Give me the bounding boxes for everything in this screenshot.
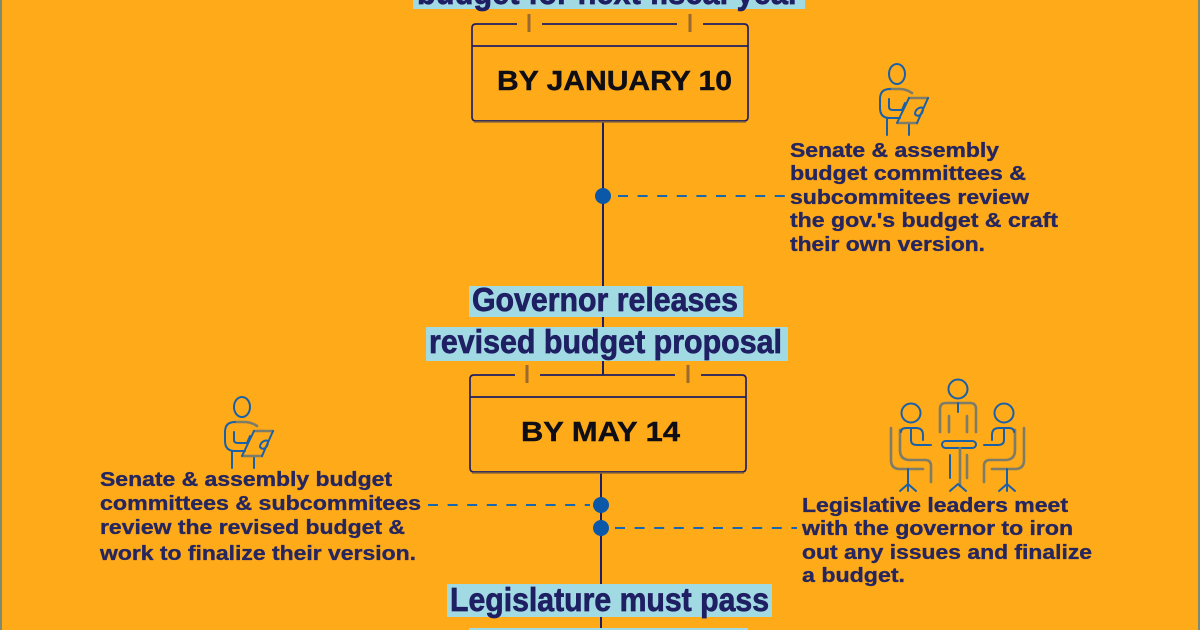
dot and dashed connector: leaders meet: [593, 520, 797, 536]
text: senate and assembly review the governor's budget: the gov.'s budget & craft: [790, 210, 1058, 232]
text: senate and assembly review the governor's budget: subcommitees review: [790, 187, 1030, 209]
icon: person with tablet (revised budget review): [225, 397, 273, 468]
dot and dashed connector: committees review: [595, 188, 785, 204]
text: legislative leaders meet with the governor: Legislative leaders meet: [802, 495, 1068, 517]
heading: governor releases revised budget proposal: Governor releases: [472, 281, 738, 318]
text: senate and assembly finalize their version: review the revised budget &: [100, 517, 405, 539]
calendar: by January 10: BY JANUARY 10: [497, 65, 732, 96]
text: legislative leaders meet with the governor: a budget.: [802, 565, 905, 587]
calendar: by May 14: BY MAY 14: [521, 416, 681, 447]
text: legislative leaders meet with the governor: [801, 495, 1092, 587]
text: senate and assembly review the governor's budget: budget committees &: [790, 163, 1026, 185]
heading: governor releases revised budget proposal: [426, 281, 788, 361]
text: legislative leaders meet with the governor: with the governor to iron: [801, 518, 1073, 540]
calendar: by May 14: [470, 365, 746, 473]
heading: legislature must pass: Legislature must pass: [450, 581, 769, 618]
text: senate and assembly review the governor's budget: Senate & assembly: [790, 140, 1000, 162]
text: senate and assembly finalize their version: committees & subcommitees: [100, 493, 421, 515]
calendar: by January 10: [472, 14, 748, 122]
heading: governor releases revised budget proposal: revised budget proposal: [429, 323, 782, 360]
text: senate and assembly review the governor's budget: their own version.: [790, 234, 985, 256]
text: legislative leaders meet with the governor: out any issues and finalize: [802, 542, 1092, 564]
icon: three people meeting at a table: [891, 380, 1024, 491]
text: senate and assembly review the governor's budget: [790, 140, 1058, 256]
dot and dashed connector: finalize version: [428, 497, 609, 513]
text: senate and assembly finalize their version: work to finalize their version.: [99, 543, 416, 565]
text: senate and assembly finalize their version: Senate & assembly budget: [100, 469, 392, 491]
timeline line: [601, 121, 603, 630]
text: senate and assembly finalize their version: [99, 469, 421, 565]
icon: person with tablet (committee review): [880, 64, 928, 135]
